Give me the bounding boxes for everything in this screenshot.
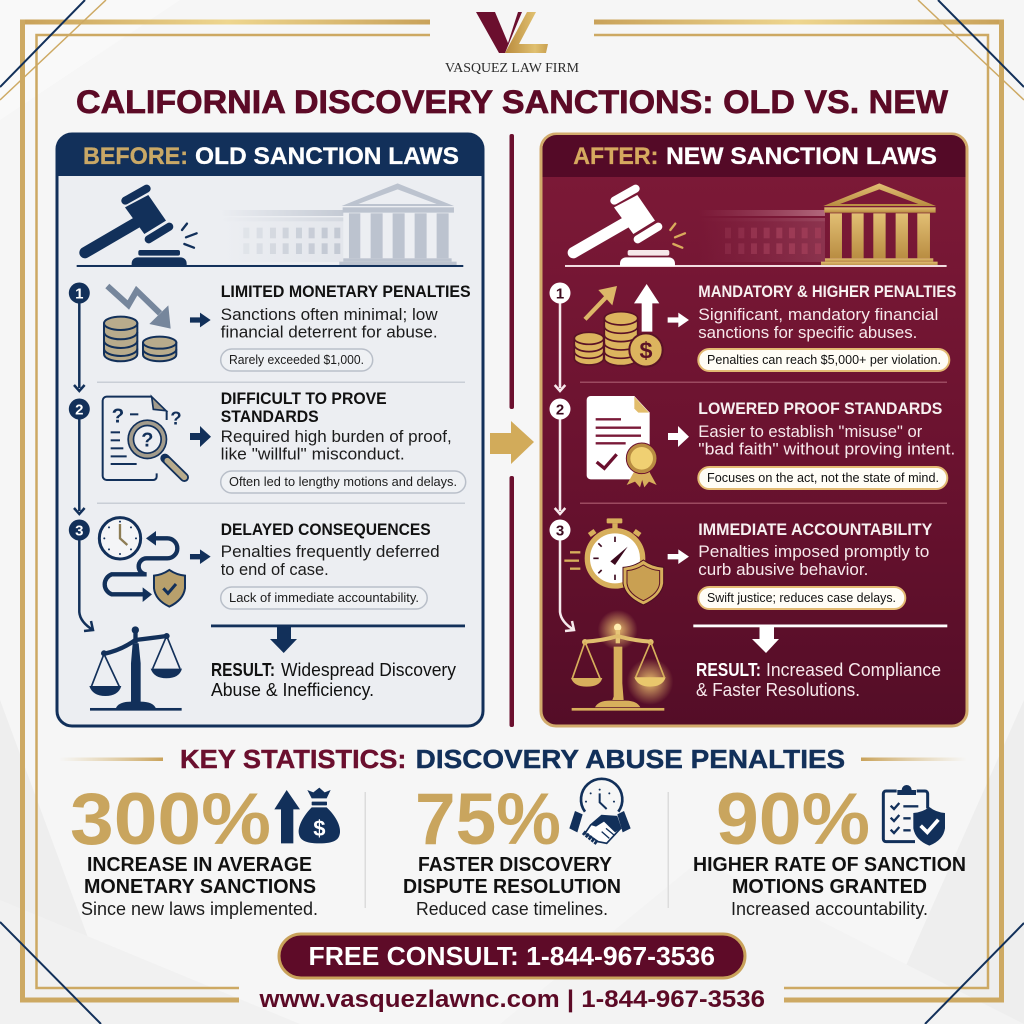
text: item 1 [698,283,956,342]
note pill: Swift justice; reduces case delays. [707,591,896,605]
timeline: after: 1 [556,286,564,302]
stat: 300 percent [70,779,340,919]
text: item 2: DIFFICULT TO PROVE [221,390,387,408]
text: item 2: "bad faith" without proving intent. [698,440,955,458]
stat: 90 percent [693,779,966,919]
text: item 1: financial deterrent for abuse. [221,324,438,342]
icon: rising coins [574,284,689,367]
center divider and arrow [490,134,534,727]
icon: stopwatch and shield [564,518,689,605]
text: item 2: STANDARDS [221,408,319,426]
stat: 90 percent: MOTIONS GRANTED [732,876,927,898]
result: before: Abuse & Inefficiency. [211,680,374,700]
result: before: RESULT: [211,660,275,680]
stat: 300 percent: MONETARY SANCTIONS [84,876,316,898]
stat: 75 percent: FASTER DISCOVERY [418,854,613,876]
icon: clock and handshake [569,779,631,843]
note pill: Focuses on the act, not the state of mind. [707,471,939,485]
stat: 300 percent: INCREASE IN AVERAGE [87,854,312,876]
note pill: Rarely exceeded $1,000. [229,353,364,367]
icon: gavel and courthouse [565,183,947,267]
timeline: before: 3 [75,522,83,540]
arrow [190,426,211,447]
icon: balance scale, navy [89,626,182,711]
icon: rising coins: $ [639,337,652,363]
icon: balance scale, gold [571,610,673,711]
stat: 300 percent: Since new laws implemented. [81,899,318,919]
logo: VASQUEZ LAW FIRM [445,60,579,75]
text: item 2 [221,390,452,464]
item 1: limited monetary penalties [104,283,471,371]
text: item 1: sanctions for specific abuses. [698,324,917,342]
text: item 3: DELAYED CONSEQUENCES [221,521,431,539]
item 3: delayed consequences [99,518,440,609]
text: item 3 [221,521,440,579]
text: item 2: Easier to establish "misuse" or [698,423,923,441]
call to action button [279,934,745,978]
result: before: Widespread Discovery [281,660,456,680]
text: item 3: curb abusive behavior. [698,561,868,579]
icon: document with magnifier: ? [141,430,153,452]
icon: document with magnifier: ? [170,408,182,429]
icon: document with magnifier [103,397,184,480]
icon: approved document with seal [587,396,657,487]
timeline: after: 2 [556,402,564,418]
note pill [698,349,949,371]
result: after [693,624,947,700]
icon: clipboard and shield [883,785,945,846]
note pill: Often led to lengthy motions and delays. [229,475,457,489]
icon: gavel and courthouse [77,183,463,267]
note pill [698,467,947,489]
text: item 3: Penalties frequently deferred [221,543,440,561]
icon: coins with falling arrow [104,286,211,361]
result: after: & Faster Resolutions. [696,680,860,700]
panel: after [541,134,967,726]
text: item 1 [221,283,471,342]
footer contact line: www.vasquezlawnc.com | 1-844-967-3536 [258,986,765,1013]
stat: 75 percent: 75% [415,779,561,860]
text: item 3: to end of case. [221,561,329,579]
heading: key statistics: DISCOVERY ABUSE PENALTIES [416,746,845,774]
icon: document with magnifier: ? [112,405,124,428]
stat: 90 percent: HIGHER RATE OF SANCTION [693,854,966,876]
item 2: lowered proof standards [587,396,955,489]
text: item 3: Penalties imposed promptly to [698,543,929,561]
heading: before [83,143,459,170]
heading: after: NEW SANCTION LAWS [666,143,937,170]
item 1: mandatory and higher penalties [574,283,956,371]
heading: key statistics: KEY STATISTICS: [180,746,406,774]
stat: 90 percent: Increased accountability. [731,899,928,919]
text: item 1: Sanctions often minimal; low [221,306,438,324]
heading: after: AFTER: [573,143,658,170]
note pill [221,471,466,493]
timeline: after [550,282,574,631]
result: before [211,624,465,700]
stat: 75 percent: Reduced case timelines. [416,899,608,919]
title: CALIFORNIA DISCOVERY SANCTIONS: OLD VS. NEW [76,84,949,120]
timeline: before [69,282,93,631]
panel: before [57,134,483,726]
timeline: before: 2 [75,402,83,418]
note pill [221,587,427,609]
note pill: Penalties can reach $5,000+ per violation. [707,353,941,367]
text: item 2: like "willful" misconduct. [221,446,405,464]
note pill [698,587,905,609]
text: item 3 [698,521,932,579]
text: item 1: MANDATORY & HIGHER PENALTIES [698,283,956,301]
heading: before: BEFORE: [83,143,188,170]
stat: 300 percent: 300% [70,779,271,860]
stat: 75 percent [403,779,631,919]
item 3: immediate accountability [564,518,932,609]
text: item 1: LIMITED MONETARY PENALTIES [221,283,471,301]
logo [445,12,579,75]
note pill: Lack of immediate accountability. [229,591,419,605]
icon: arrow and money bag [274,788,340,843]
timeline: before: 1 [75,286,83,302]
stat: 75 percent: DISPUTE RESOLUTION [403,876,621,898]
call to action button: FREE CONSULT: 1-844-967-3536 [308,941,715,971]
timeline: after: 3 [556,522,564,540]
text: item 2 [698,400,955,458]
arrow [668,426,689,447]
stat: 90 percent: 90% [716,779,870,860]
heading: key statistics [59,746,967,774]
text: item 2: Required high burden of proof, [221,428,452,446]
icon: clock, winding arrow and shield [99,518,211,607]
item 2: difficult to prove standards [103,390,466,493]
text: item 3: IMMEDIATE ACCOUNTABILITY [698,521,932,539]
note pill [221,349,373,371]
heading: before: OLD SANCTION LAWS [195,143,459,170]
result: after: Increased Compliance [766,660,941,680]
result: after: RESULT: [696,660,761,680]
text: item 1: Significant, mandatory financial [698,306,938,324]
text: item 2: LOWERED PROOF STANDARDS [698,400,942,418]
icon: arrow and money bag: $ [313,816,325,841]
